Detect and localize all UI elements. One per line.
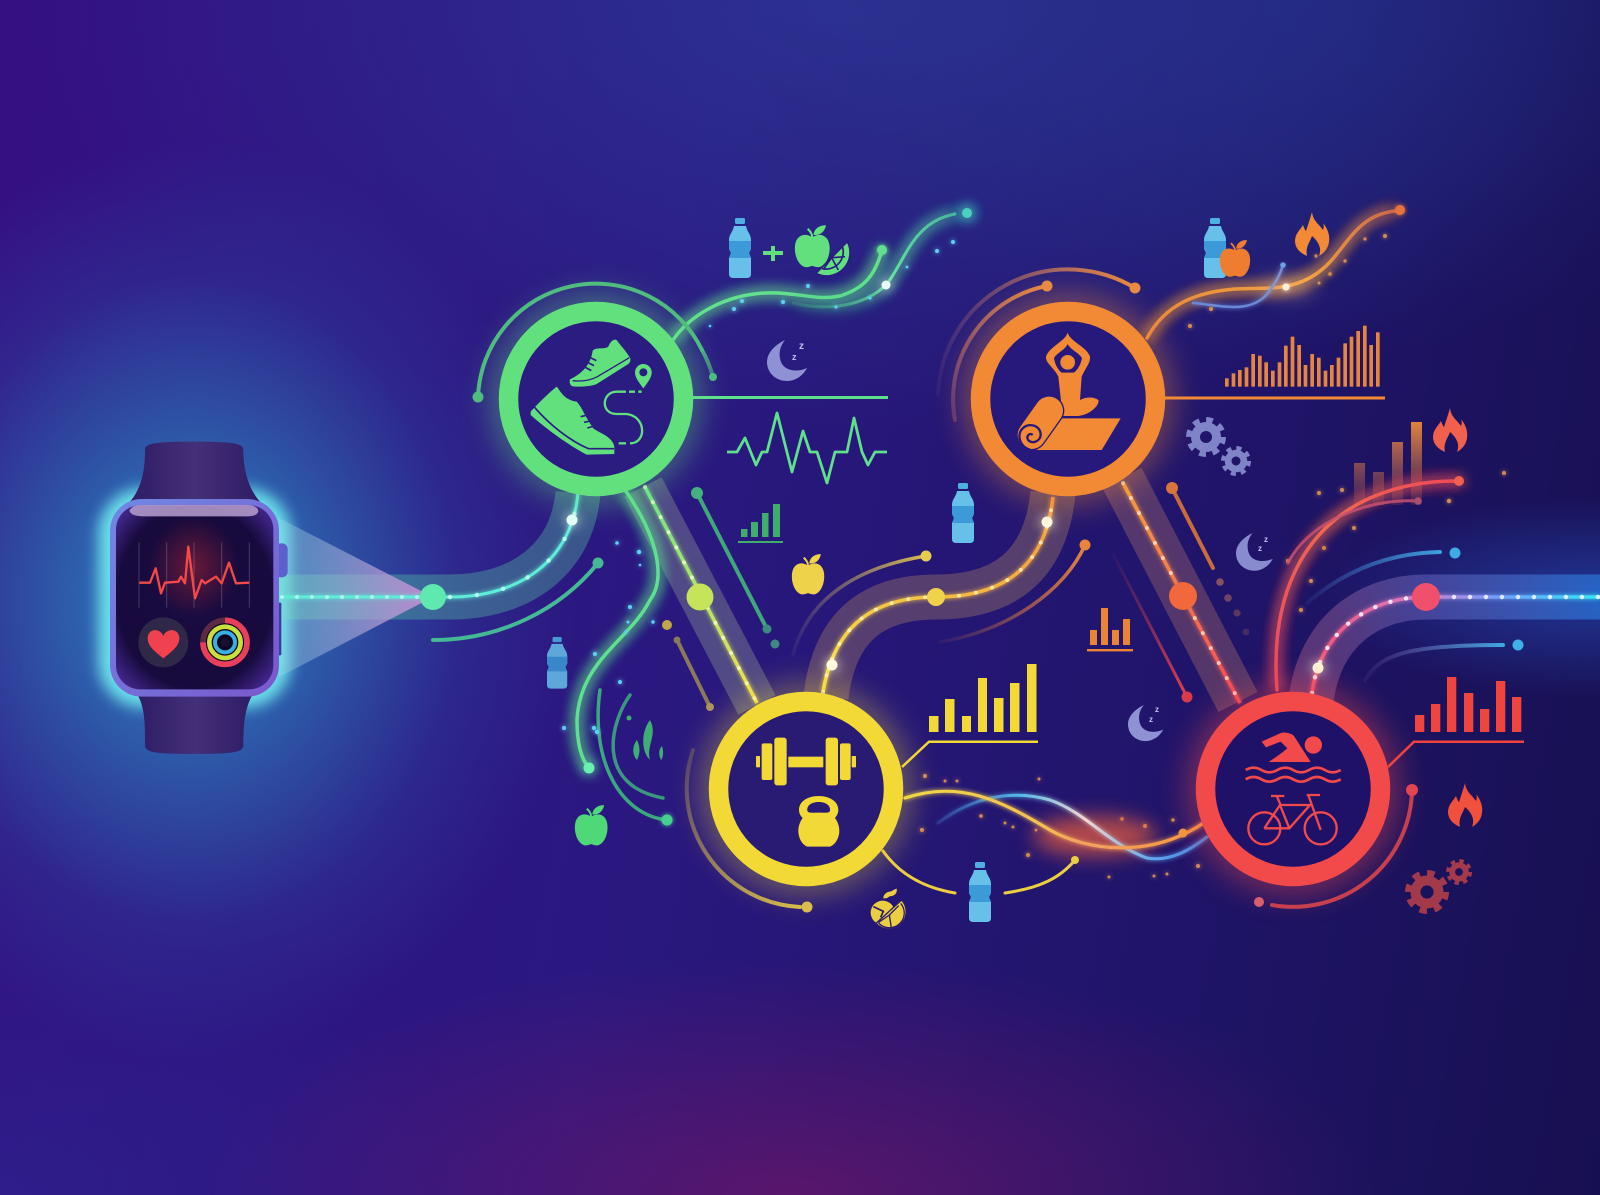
node 2: orange ring	[978, 309, 1158, 489]
green wavy lines top	[673, 208, 972, 340]
icon: moon 2: z	[1264, 535, 1268, 544]
small orange bar chart	[1087, 608, 1133, 651]
glow behind watch	[98, 488, 291, 708]
ecg line	[139, 547, 249, 598]
icon: green apple	[575, 805, 608, 845]
yoga mat	[1019, 411, 1121, 450]
orange curve to yellow band	[940, 540, 1090, 642]
node 1: green ring	[506, 309, 686, 489]
green small bar chart	[738, 504, 783, 543]
green thin curves	[433, 487, 780, 826]
connector: red to right edge	[1311, 583, 1600, 700]
watch case	[110, 499, 279, 697]
icon: left small bottle	[547, 637, 567, 689]
yellow lower lines	[883, 851, 1079, 893]
screen	[116, 505, 273, 689]
node 4: red ring	[1203, 699, 1383, 879]
connector: yellow to orange	[823, 493, 1053, 697]
route path	[605, 392, 642, 443]
icon: yoga and mat	[1019, 333, 1121, 450]
red faint diagonal	[1112, 552, 1192, 702]
green divider line	[693, 396, 888, 399]
icon: steam	[626, 716, 663, 760]
kettlebell	[798, 796, 839, 847]
icon: red flame bottom	[1448, 783, 1482, 827]
smartwatch	[110, 442, 288, 754]
green heartbeat line	[727, 413, 887, 483]
ecg grid	[139, 542, 249, 608]
orange diagonal with fading dots	[1166, 482, 1249, 635]
swimmer	[1262, 733, 1322, 762]
icon: bottle bottom	[969, 862, 991, 922]
bottom strap	[137, 693, 253, 754]
icon: yellow apple	[792, 554, 824, 594]
top highlight	[129, 505, 258, 516]
icon: red flame top	[1433, 408, 1467, 452]
beam cone from watch	[279, 518, 433, 677]
orange arcs around node 2	[938, 269, 1140, 420]
location pin	[635, 364, 652, 388]
icon: moon and z: z	[792, 352, 797, 362]
yellow faint diagonal	[662, 620, 714, 711]
top shoe	[570, 340, 630, 387]
icon: dumbbell and kettlebell	[756, 738, 856, 847]
crown and side button	[275, 543, 288, 655]
waves	[1246, 768, 1341, 782]
orange gradient bars	[1354, 422, 1422, 505]
top strap	[130, 442, 260, 502]
icon: moon 3: z	[1155, 705, 1159, 714]
beam band from watch to first node	[279, 493, 578, 597]
bottom shoe	[531, 387, 614, 455]
icon: moon 3	[1128, 705, 1163, 741]
ecg glow	[148, 517, 238, 617]
yellow arc below node 3	[687, 750, 812, 912]
icon: moon 3: z	[1149, 715, 1153, 724]
yellow curve to top node	[793, 550, 932, 655]
green arc around node 1	[472, 284, 717, 402]
icon: moon 2	[1236, 533, 1273, 571]
lime slice	[816, 242, 850, 276]
beam dotted signal line	[279, 493, 578, 610]
icon: bottle and orange apple	[1204, 218, 1250, 278]
orange wavy lines top	[1147, 205, 1405, 338]
orange dense bar chart	[1225, 326, 1380, 387]
dumbbell	[756, 738, 856, 785]
icon: bottle plus fruit	[729, 218, 850, 278]
red curved lines upper right	[1276, 476, 1524, 690]
yellow to red wave lines	[905, 791, 1207, 859]
bicycle	[1248, 795, 1337, 844]
particles blue-green	[562, 240, 955, 734]
icon: running shoes and route	[531, 340, 652, 455]
icon: swimmer and bicycle	[1246, 733, 1341, 844]
icon: moon and z	[767, 340, 807, 381]
red bar chart	[1415, 677, 1521, 732]
icon: gears lavender	[1189, 420, 1249, 474]
yellow bar chart	[929, 664, 1036, 732]
particles orange	[920, 234, 1506, 878]
icon: center bottle	[952, 483, 974, 543]
icon: moon and z: z	[799, 341, 804, 352]
connector: green to yellow	[643, 487, 757, 705]
red arc below node 4	[1254, 784, 1418, 907]
node 3: yellow ring	[716, 699, 896, 879]
heart button	[138, 617, 188, 667]
icon: citrus fruit	[871, 889, 906, 929]
icon: orange flame	[1295, 212, 1329, 256]
connector: orange to red	[1122, 478, 1240, 703]
yoga figure	[1046, 333, 1099, 416]
activity rings	[200, 617, 250, 667]
red callout line	[1388, 742, 1524, 767]
icon: moon 2: z	[1258, 544, 1262, 553]
icon: red gears	[1408, 861, 1470, 911]
orange divider line	[1165, 396, 1385, 400]
yellow callout line	[902, 742, 1038, 767]
